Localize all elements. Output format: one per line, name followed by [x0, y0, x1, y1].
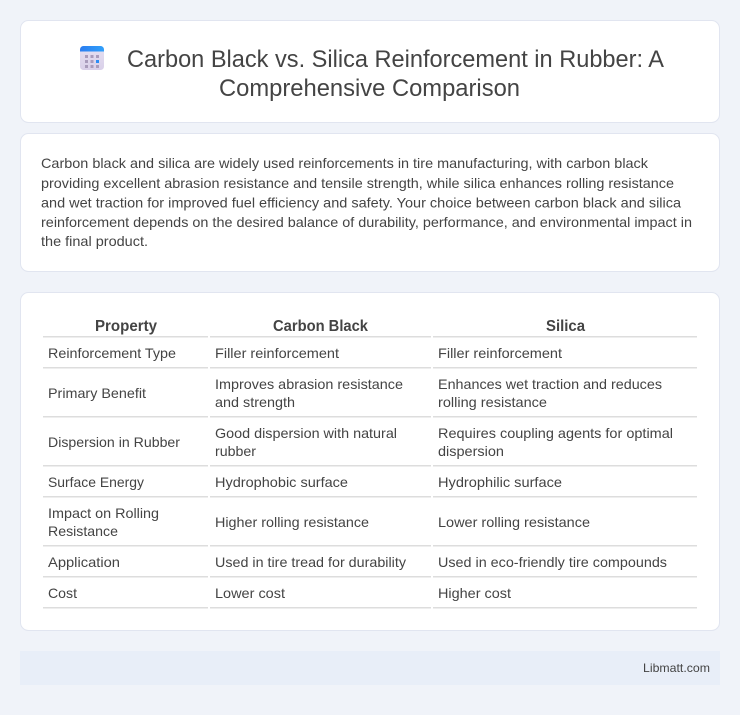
row: application	[48, 554, 667, 570]
row: primary benefit: Enhances wet traction and reduces	[438, 376, 662, 392]
row: surface energy: Surface Energy	[48, 474, 144, 490]
footer bar	[20, 651, 720, 685]
row: surface energy: Hydrophilic surface	[438, 474, 562, 490]
row: cost	[48, 585, 511, 601]
row: surface energy: Hydrophobic surface	[215, 474, 348, 490]
row: cost: Cost	[48, 585, 77, 601]
intro text block: the final product.	[41, 233, 148, 249]
panel: introduction	[20, 134, 720, 272]
row: reinforcement type: Reinforcement Type	[48, 345, 176, 361]
row: dispersion in rubber: Good dispersion with natural	[215, 425, 397, 441]
intro text block: reinforcement depends on the desired balance of durability, performance, and environmental impact in	[41, 214, 692, 230]
row: surface energy	[48, 474, 562, 490]
intro text block: and wet traction for improved fuel efficiency and safety. Your choice between carbon black and silica	[41, 194, 681, 210]
row: primary benefit: rolling resistance	[438, 394, 547, 410]
table header row	[95, 318, 585, 335]
intro text block	[41, 155, 692, 249]
row: dispersion in rubber: Dispersion in Rubber	[48, 434, 180, 450]
row: primary benefit: Primary Benefit	[48, 385, 146, 401]
row: impact on rolling resistance: Lower rolling resistance	[438, 514, 590, 530]
panel: comparison table	[20, 292, 720, 630]
row: primary benefit: Improves abrasion resistance	[215, 376, 403, 392]
row: impact on rolling resistance: Higher rolling resistance	[215, 514, 369, 530]
row: impact on rolling resistance	[48, 505, 590, 539]
row: impact on rolling resistance: Impact on Rolling	[48, 505, 159, 521]
row: dispersion in rubber: Requires coupling agents for optimal	[438, 425, 673, 441]
footer bar: Libmatt.com	[643, 661, 710, 675]
table header row: Property	[95, 318, 157, 335]
row: dispersion in rubber: dispersion	[438, 443, 504, 459]
icon: calendar	[80, 46, 104, 70]
row: dispersion in rubber	[48, 425, 673, 459]
row: primary benefit	[48, 376, 662, 410]
row: cost: Higher cost	[438, 585, 511, 601]
panel: title header	[20, 20, 720, 122]
row: reinforcement type: Filler reinforcement	[215, 345, 339, 361]
row: primary benefit: and strength	[215, 394, 295, 410]
title: Comprehensive Comparison	[219, 75, 520, 102]
row: dispersion in rubber: rubber	[215, 443, 256, 459]
title	[127, 46, 664, 102]
intro text block: Carbon black and silica are widely used reinforcements in tire manufacturing, with carbon black	[41, 155, 649, 171]
row: application: Application	[48, 554, 120, 570]
row: application: Used in eco-friendly tire compounds	[438, 554, 667, 570]
row: reinforcement type: Filler reinforcement	[438, 345, 562, 361]
row: impact on rolling resistance: Resistance	[48, 523, 118, 539]
row: reinforcement type	[48, 345, 562, 361]
table header row: Silica	[546, 318, 585, 335]
row: cost: Lower cost	[215, 585, 285, 601]
table header row: Carbon Black	[273, 318, 368, 335]
row: application: Used in tire tread for durability	[215, 554, 406, 570]
intro text block: providing excellent abrasion resistance and tensile strength, while silica enhances rolling resistance	[41, 175, 674, 191]
title: Carbon Black vs. Silica Reinforcement in Rubber: A	[127, 46, 664, 73]
